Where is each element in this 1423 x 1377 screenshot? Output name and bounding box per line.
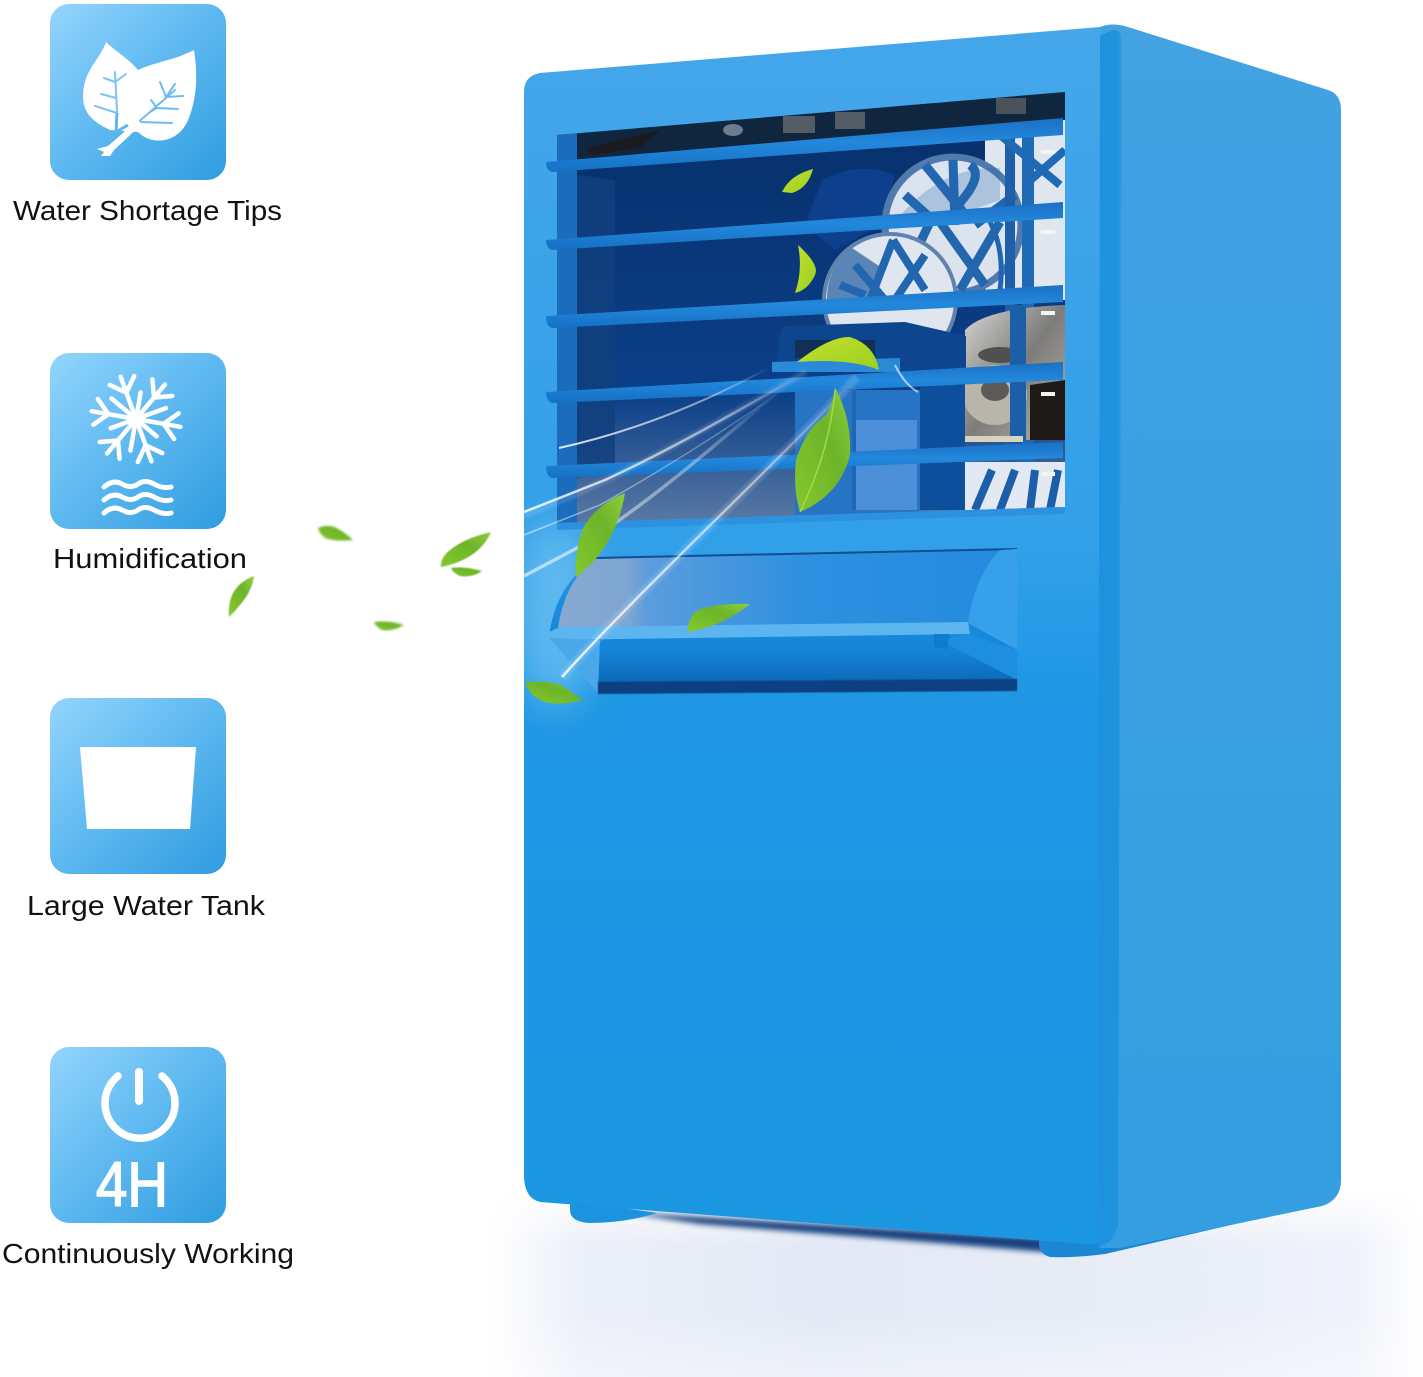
wind streaks [524, 365, 918, 677]
icon tile: continuously working [50, 1047, 226, 1223]
floor shadow [490, 1190, 1423, 1377]
leaf: floating low [374, 621, 404, 630]
dark blob behind fan [805, 169, 895, 250]
leaf: small yellow top [782, 169, 813, 193]
fan pins [1041, 150, 1055, 476]
feet [570, 1200, 1297, 1257]
glow patch under airflow [515, 520, 595, 710]
icon tile: humidification [50, 353, 226, 529]
water tray [549, 549, 1017, 694]
leaf: curved yellow [795, 245, 816, 293]
motor box [775, 322, 966, 372]
connector blocks [587, 98, 1026, 155]
foot shadow [620, 1212, 1045, 1252]
front panel [524, 27, 1100, 1244]
motor [963, 305, 1065, 442]
leaf: bottom [525, 682, 583, 704]
louvers [546, 118, 1063, 478]
fan housing [822, 120, 1065, 462]
leaf: floating blurred [318, 526, 353, 541]
air cooler unit [515, 24, 1341, 1257]
leaf: bright on motor [797, 337, 879, 370]
icon tile: continuously working: 4H [96, 1150, 168, 1220]
fan lower [965, 462, 1065, 510]
side panel [1100, 24, 1341, 1248]
inner lower blocks [795, 390, 920, 515]
window bottom lip [557, 507, 1065, 530]
leaf: floating left [229, 576, 254, 617]
leaf: floating right small [451, 567, 482, 576]
side seam strip [1098, 30, 1122, 1246]
leaves [229, 169, 879, 704]
icon tile: water shortage tips [50, 4, 226, 180]
leaf: floating right large [441, 532, 491, 567]
leaf: on tray [688, 604, 750, 632]
window top band [558, 92, 1065, 160]
label: humidification: Humidification [53, 543, 247, 574]
label: continuously working: Continuously Working [2, 1238, 294, 1269]
leaf: on tray top [576, 493, 625, 577]
label: large water tank: Large Water Tank [27, 890, 266, 921]
side wall [557, 130, 577, 530]
leaf: large veined [795, 387, 850, 512]
louver window [550, 85, 1070, 530]
label: water shortage tips: Water Shortage Tips [13, 195, 282, 226]
icon tile: large water tank [50, 698, 226, 874]
